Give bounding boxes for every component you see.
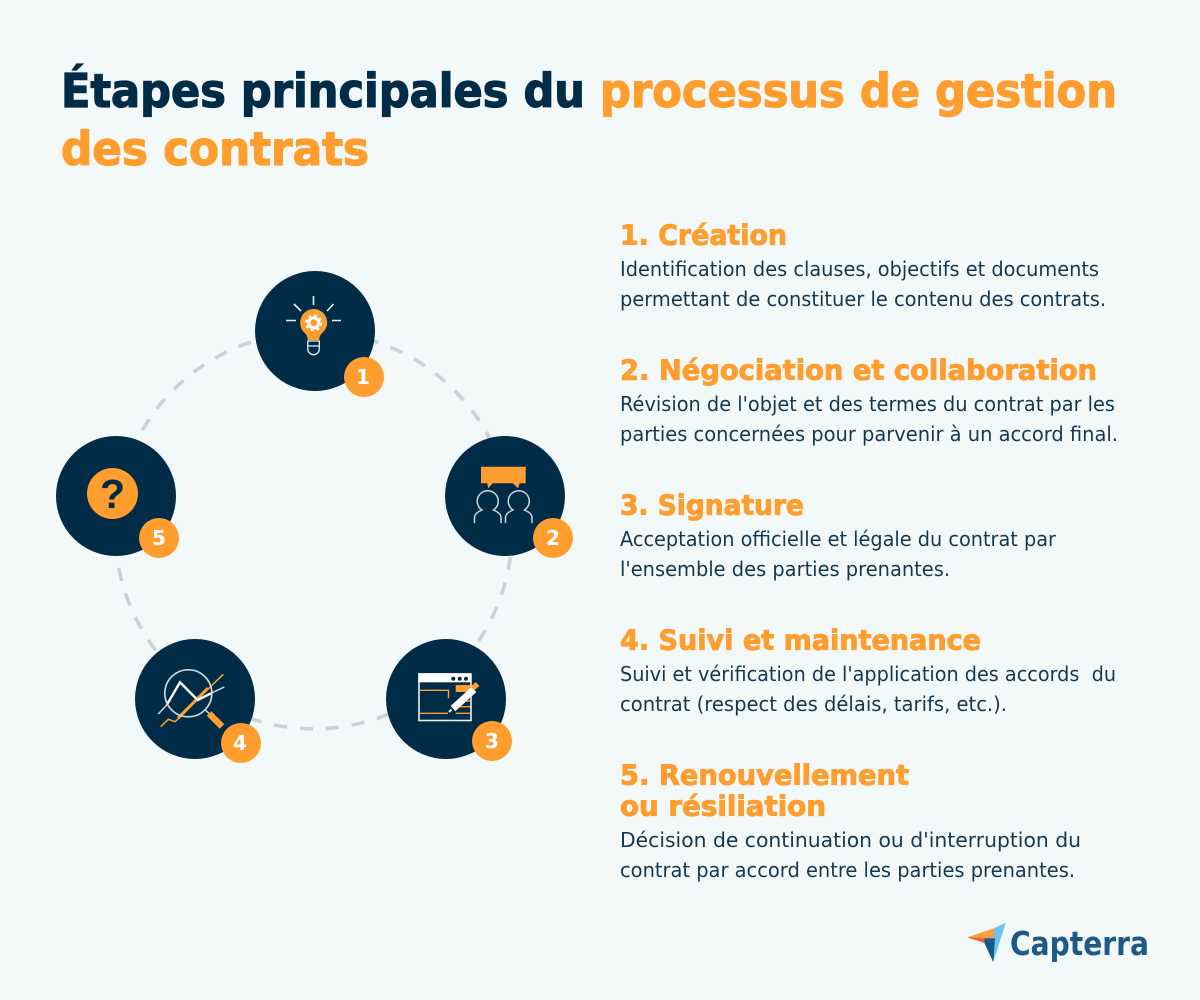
text block: step 2 <box>620 354 1118 446</box>
icon: lightbulb with gear <box>286 296 341 355</box>
icon: magnifying glass over chart <box>158 670 224 727</box>
text block: step 5: contrat par accord entre les parties prenantes. <box>620 858 1075 882</box>
text block: step 3: Acceptation officielle et légale du contrat par <box>620 527 1057 551</box>
text block: step 1: permettant de constituer le contenu des contrats. <box>620 287 1106 311</box>
badge 3: 3 <box>485 729 499 753</box>
badge 5: 5 <box>152 526 166 550</box>
text block: step 5 <box>620 758 1081 882</box>
text block: step 4: 4. Suivi et maintenance <box>620 624 981 656</box>
step 1 node: lightbulb <box>255 271 384 397</box>
text block: step 5: Décision de continuation ou d'interruption du <box>620 828 1081 852</box>
badge 4: 4 <box>233 731 247 755</box>
icon: two people with speech bubble <box>474 467 532 523</box>
step 3 node: signature <box>386 639 512 761</box>
text block: step 5: 5. Renouvellement <box>620 758 909 792</box>
text block: step 2: 2. Négociation et collaboration <box>620 354 1097 386</box>
text block: step 4: contrat (respect des délais, tarifs, etc.). <box>620 692 1007 716</box>
title: Étapes principales du <box>61 64 585 118</box>
title <box>61 64 1117 176</box>
title: des contrats <box>61 122 369 176</box>
badge 2: 2 <box>546 526 560 550</box>
step 5 node: decision <box>56 436 179 558</box>
text block: step 3: 3. Signature <box>620 488 804 522</box>
text block: step 4: Suivi et vérification de l'application des accords du <box>620 662 1116 686</box>
text block: step 2: parties concernées pour parvenir à un accord final. <box>620 422 1118 446</box>
text block: step 1: Identification des clauses, objectifs et documents <box>620 257 1099 281</box>
title: processus de gestion <box>600 64 1117 118</box>
icon: document window with pen <box>418 673 478 720</box>
icon: question mark: ? <box>100 471 125 517</box>
dashed cycle ring <box>115 332 512 729</box>
step 4 node: monitoring <box>135 639 261 763</box>
badge 1: 1 <box>356 365 370 389</box>
logo: Capterra <box>967 923 1149 963</box>
text block: step 2: Révision de l'objet et des termes du contrat par les <box>620 392 1115 416</box>
text block: step 1 <box>620 218 1106 311</box>
icon: Capterra arrow <box>967 923 1006 962</box>
text block: step 1: 1. Création <box>620 218 787 252</box>
text block: step 3: l'ensemble des parties prenantes. <box>620 557 950 581</box>
text block: step 3 <box>620 488 1057 581</box>
text block: step 4 <box>620 624 1116 716</box>
text block: step 5: ou résiliation <box>620 790 826 822</box>
logo: Capterra: Capterra <box>1010 924 1149 963</box>
step 2 node: discussion <box>445 436 573 558</box>
